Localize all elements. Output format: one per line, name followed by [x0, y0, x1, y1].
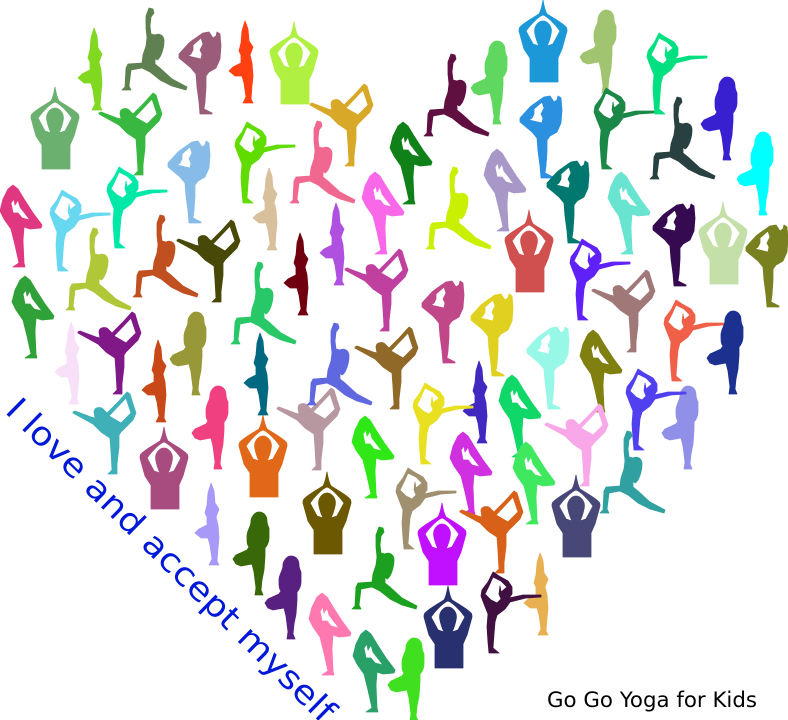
figure: namaste slate	[552, 475, 600, 557]
figure: dancer bright green	[235, 122, 295, 203]
figure: dancer dark plum	[481, 572, 541, 653]
figure: tree arms up tan	[253, 168, 277, 250]
figure: dancer aqua green	[107, 167, 167, 248]
figure: lunge green	[352, 527, 417, 609]
figure: tree indigo	[701, 77, 737, 160]
figure: dancer blue violet	[626, 369, 686, 450]
figure: tree light green	[471, 41, 507, 124]
figure: tree arms up lime	[78, 28, 102, 110]
figure: namaste orange	[239, 415, 287, 497]
figure: bow magenta	[0, 185, 42, 267]
figure: dancer brown	[355, 327, 418, 409]
credit: Go Go Yoga for Kids	[547, 688, 757, 712]
figure: dancer sea blue	[73, 392, 136, 474]
figure: dancer orange	[460, 491, 523, 573]
figure: bow bright green	[513, 442, 555, 524]
figure: dancer yellow	[471, 294, 513, 376]
figure: bow lavender	[484, 149, 526, 231]
figure: tree arms up amber	[524, 553, 548, 635]
figure: lunge maroon	[424, 54, 489, 136]
slogan along heart edge: I love and accept myself	[0, 390, 345, 720]
figure: dancer magenta	[345, 249, 408, 331]
figure: dancer blue	[520, 96, 562, 178]
figure: dancer taupe	[592, 270, 655, 352]
figure: bow green	[12, 276, 54, 358]
figure: lunge yellow-green	[426, 167, 491, 249]
figure: tree hot pink	[192, 386, 228, 469]
figure: namaste violet	[418, 503, 466, 585]
figure: bow pink	[309, 593, 351, 675]
figure: tree cyan	[737, 132, 773, 215]
figure: bow olive	[580, 330, 622, 412]
figure: tree moss	[233, 512, 269, 595]
figure: tree bright green	[388, 638, 424, 720]
figure: dancer khaki	[396, 468, 456, 549]
figure: lunge rust	[133, 215, 198, 297]
figure: tree arms up indigo	[463, 361, 487, 443]
figure: dancer green	[99, 93, 162, 175]
figure: dancer light pink	[545, 404, 608, 486]
figure: dancer mauve	[179, 32, 221, 114]
figure: lunge sage	[122, 8, 187, 90]
figure: bow aqua	[608, 172, 650, 254]
figure: lunge pink	[290, 121, 355, 203]
figure: bow dark green	[390, 122, 432, 204]
figure: bow pale cyan	[527, 327, 569, 409]
figure: bow orchid	[362, 172, 404, 254]
figure: dancer coral	[664, 300, 724, 381]
figure: dancer forest	[594, 88, 654, 169]
figure: tree sage	[580, 10, 616, 93]
figure: namaste navy	[424, 586, 472, 668]
figure: lunge charcoal	[650, 97, 715, 179]
figure: dancer light blue	[50, 190, 110, 271]
figure: tree purple	[265, 556, 301, 639]
figure: tree arms up burnt orange	[142, 340, 166, 422]
figure: namaste blue	[519, 0, 567, 82]
figure: tree arms up deep teal	[244, 333, 268, 415]
figure: tree arms up pale pink	[55, 322, 79, 404]
figure: bow lime green	[352, 416, 394, 498]
figure: bow jade	[353, 630, 395, 712]
figure: dancer violet	[570, 239, 630, 320]
figure: tree arms up dark red	[284, 233, 308, 315]
figure: tree navy	[707, 311, 743, 394]
figure: dancer dusty rose	[277, 388, 340, 470]
figure: lunge olive lime	[66, 228, 131, 310]
figure: dancer gold	[310, 84, 373, 166]
figure: tree arms up purple	[320, 203, 344, 285]
figure: tree arms up lilac	[195, 483, 219, 565]
figure: bow emerald	[499, 375, 541, 457]
figure: namaste lime	[270, 22, 318, 104]
figure: namaste plum	[140, 427, 188, 509]
figure: tree arms up orange-red	[229, 21, 253, 103]
figure: namaste green	[31, 87, 79, 169]
figure: namaste red	[505, 210, 553, 292]
figure: namaste pale green	[699, 202, 747, 284]
figure: dancer deep purple	[653, 204, 695, 286]
figure: dancer sky	[168, 141, 210, 223]
figure: lunge green	[231, 262, 296, 344]
figure: tree olive	[170, 312, 206, 395]
figure: dancer rose	[422, 281, 464, 363]
figure: lunge teal	[600, 431, 665, 513]
figure: dancer teal	[547, 161, 589, 243]
figure: namaste brown	[303, 472, 351, 554]
figure: dancer mint	[647, 33, 707, 114]
figure: dancer purple	[78, 312, 141, 394]
figure: lunge periwinkle	[307, 323, 372, 405]
figure: dancer dark olive	[177, 220, 240, 302]
figure: dancer olive	[746, 225, 788, 307]
figure: bow purple	[450, 432, 492, 514]
figure: dancer yellow	[413, 383, 473, 464]
figure: tree periwinkle	[662, 386, 698, 469]
